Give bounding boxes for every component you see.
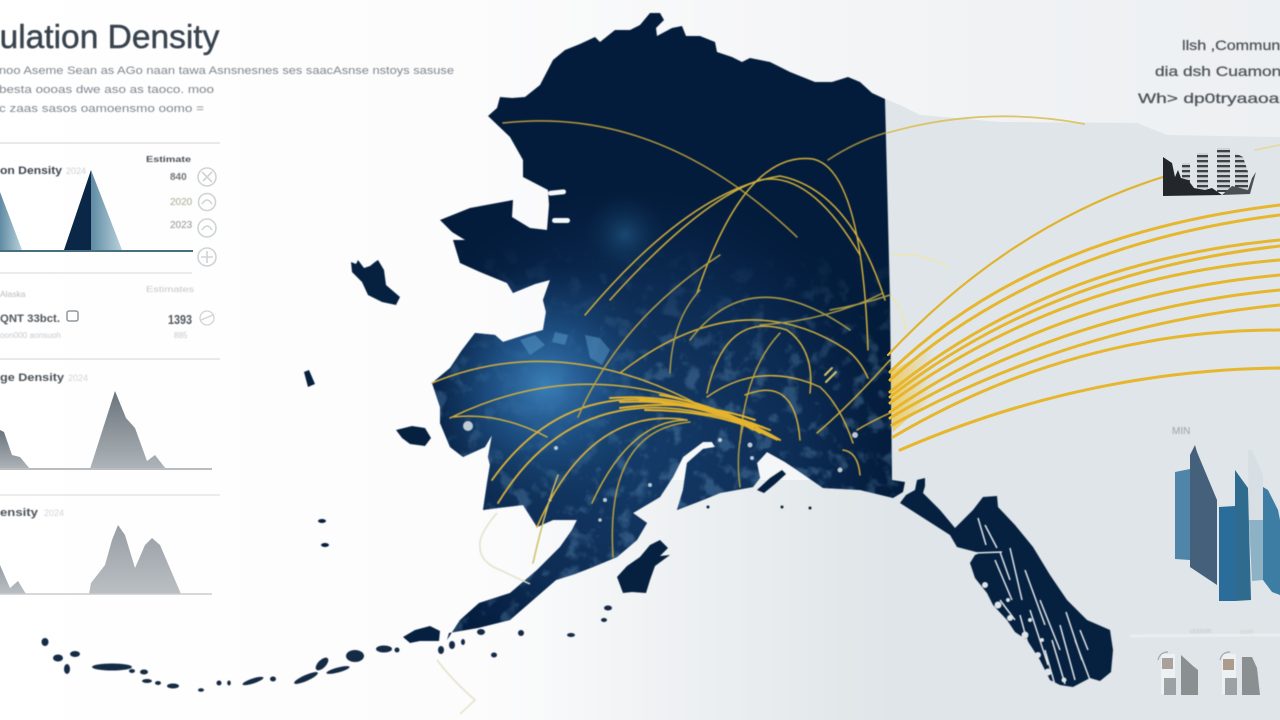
chart: skyscraper bars xyxy=(1172,426,1280,601)
panel: summary row xyxy=(0,273,220,359)
islands: Prince William Sound xyxy=(757,470,786,493)
Alaska panhandle xyxy=(900,478,1113,687)
legend values: Estimate xyxy=(146,154,191,164)
intro text block xyxy=(0,65,454,115)
text block: top right notes: dia dsh Cuamonc xyxy=(1155,63,1280,79)
icon: city skyline xyxy=(1163,148,1256,196)
islands: Kodiak xyxy=(617,540,670,593)
legend values: 840 xyxy=(170,172,187,183)
panel: summary row: 885 xyxy=(174,331,188,340)
arcs across the map xyxy=(432,121,890,563)
icon: building stats 1 xyxy=(1158,652,1198,695)
mainland xyxy=(432,12,906,640)
divider caption xyxy=(1130,628,1280,636)
chart label xyxy=(0,165,86,177)
intro text block: noo Aseme Sean as AGo naan tawa Asnsnesnes ses saacAsnse nstoys sasuse xyxy=(0,65,454,77)
chart label: 2024 xyxy=(44,508,64,518)
text block: top right notes xyxy=(1138,37,1280,106)
chart label: 2024 xyxy=(68,373,88,383)
island: Nunivak xyxy=(396,426,431,446)
chart label xyxy=(0,372,88,384)
panel: density chart 4 xyxy=(0,507,212,594)
small islands xyxy=(304,370,812,547)
flow lines fan xyxy=(888,145,1280,450)
top arc over panel xyxy=(887,116,1085,133)
chart label: ensity xyxy=(0,507,39,519)
icon: building stats 2 xyxy=(1220,652,1260,695)
glow at fan origin xyxy=(891,345,935,432)
mountain chart xyxy=(0,391,212,469)
text block: top right notes: Wh> dp0tryaaoau xyxy=(1138,90,1280,106)
row icon box xyxy=(67,311,78,321)
intro text block: c zaas sasos oamoensmo oomo = xyxy=(0,103,204,115)
chart label: 2024 xyxy=(66,166,86,176)
white specks xyxy=(463,421,858,522)
chart label: ge Density xyxy=(0,372,65,384)
triangle chart xyxy=(0,170,193,251)
panel: summary row: Estimates xyxy=(146,284,194,294)
legend values: 2023 xyxy=(170,220,193,231)
mountain chart xyxy=(0,525,212,594)
panel: density chart 1 xyxy=(0,143,220,266)
legend values: 2020 xyxy=(170,197,193,208)
row status icon xyxy=(200,311,214,325)
island: St Lawrence xyxy=(351,260,400,305)
central knot xyxy=(610,395,780,440)
text block: top right notes: llsh ,Communic xyxy=(1182,37,1280,53)
panel: right backdrop xyxy=(880,97,1280,720)
chart label: MIN xyxy=(1172,426,1190,437)
legend values xyxy=(146,154,193,231)
divider caption: uuuum xyxy=(1190,628,1212,635)
panel: summary row: Alaska xyxy=(0,289,26,299)
intro text block: besta oooas dwe aso as taoco. moo xyxy=(0,84,214,96)
speckled western edge xyxy=(982,582,1066,682)
panel: summary row: oon000 aonsuoh xyxy=(0,331,61,340)
row value: 1393 xyxy=(168,312,192,327)
legend icons xyxy=(198,168,216,266)
inlet white detail xyxy=(548,189,570,223)
Alaskan Peninsula southern islands and Aleutian chain xyxy=(42,606,612,692)
faint lines below the map xyxy=(437,513,530,714)
divider caption: oom xyxy=(1240,629,1254,636)
panel: density chart 3 xyxy=(0,372,220,495)
chart label xyxy=(0,507,64,519)
row label: QNT 33bct. xyxy=(0,313,60,325)
chart label: on Density xyxy=(0,165,63,177)
